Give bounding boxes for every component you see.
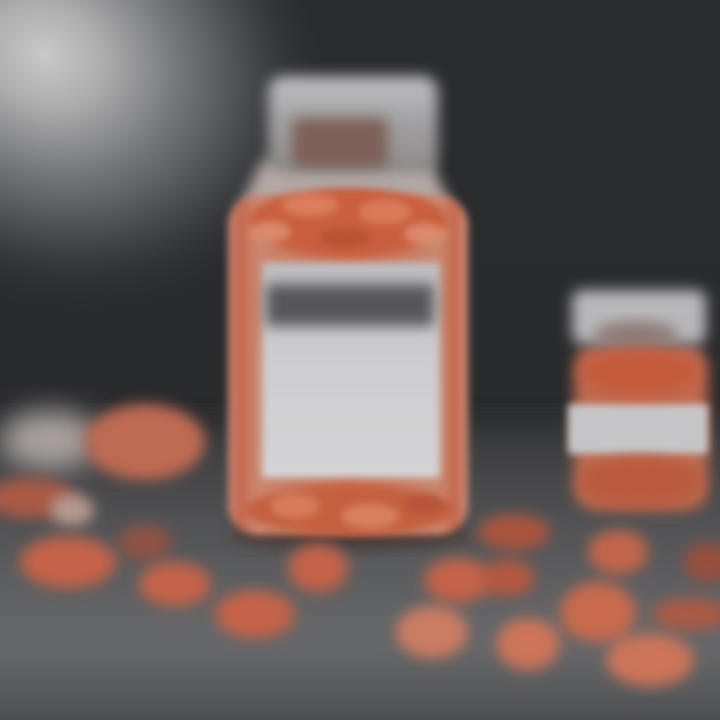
small bottle body — [574, 345, 708, 510]
bottom pills band — [245, 486, 455, 534]
label dark title band — [266, 284, 434, 326]
small bottle cap inner — [594, 321, 678, 349]
pill group left — [20, 536, 116, 588]
cap interior dark area — [292, 118, 388, 168]
small bottle at right — [568, 290, 708, 510]
bottle shoulder glass — [236, 160, 455, 215]
blurred bottle on its side at left — [0, 404, 205, 526]
small bottle bottom pills — [578, 458, 702, 506]
side bottle pale spot — [50, 494, 94, 526]
upper pills band — [248, 188, 448, 256]
bottle shadow — [230, 521, 470, 549]
reflective floor surface — [0, 425, 720, 720]
cap — [268, 76, 438, 172]
large bottle — [228, 76, 470, 549]
small bottle top pills — [580, 348, 700, 396]
pill group right — [478, 514, 550, 550]
side bottle cap — [0, 410, 100, 470]
bottle body — [228, 195, 468, 535]
side bottle spill — [0, 478, 75, 518]
scattered pills — [20, 514, 720, 686]
label — [262, 262, 440, 478]
side bottle body — [85, 404, 205, 480]
small bottle cap — [572, 290, 706, 344]
small bottle label — [568, 404, 708, 454]
